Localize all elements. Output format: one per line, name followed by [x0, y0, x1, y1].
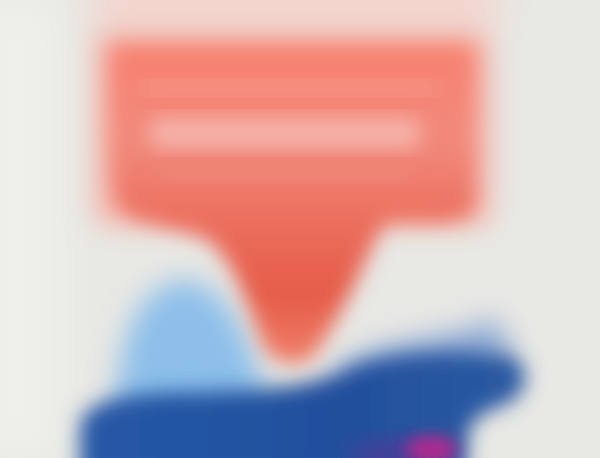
upper right pale blue wave — [330, 318, 515, 400]
purple blend — [350, 439, 450, 458]
light blue wave — [115, 280, 262, 420]
callout halo — [95, 30, 490, 225]
faint upper band — [140, 82, 440, 94]
dark blue band — [80, 352, 525, 458]
red speech callout — [95, 30, 490, 364]
magenta accent — [406, 436, 458, 458]
blue wave shape — [80, 280, 525, 458]
pale headline band — [150, 118, 420, 148]
callout body — [110, 45, 475, 364]
faint lower band — [160, 168, 410, 180]
